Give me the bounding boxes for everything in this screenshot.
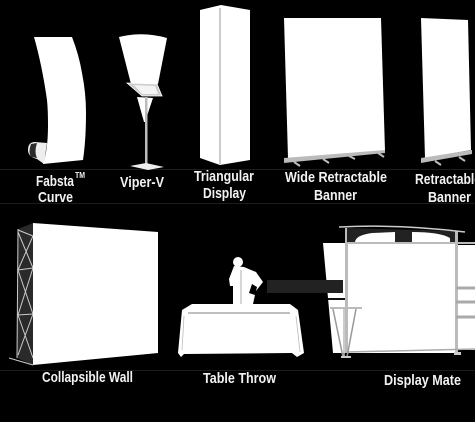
product: Display Mate: [267, 226, 475, 389]
icon: wide banner: [284, 18, 385, 166]
product: Retractable Banner: [415, 18, 475, 206]
label: Triangular Display: Display: [203, 185, 247, 202]
icon: retractable banner: [421, 18, 472, 165]
label: Fabsta Curve: [36, 171, 85, 206]
product: Wide Retractable Banner: [284, 18, 387, 204]
icon: viper stand: [119, 34, 167, 170]
icon: curved banner: [28, 37, 86, 164]
label: Triangular Display: Triangular: [194, 168, 254, 185]
label: Wide Retractable Banner: Wide Retractable: [285, 169, 387, 186]
label: Triangular Display: [194, 168, 254, 202]
icon: person: [229, 257, 263, 304]
icon: collapsible wall: [9, 223, 158, 365]
label: Display Mate: Display Mate: [384, 372, 461, 389]
label: Viper-V: Viper-V: [120, 174, 164, 191]
label: Fabsta Curve: Fabsta: [36, 173, 75, 190]
label: Fabsta Curve: TM: [75, 171, 85, 180]
label: Wide Retractable Banner: Banner: [314, 187, 357, 204]
product: Triangular Display: [194, 5, 254, 202]
product: Table Throw: [178, 257, 304, 387]
label: Retractable Banner: [415, 171, 475, 206]
label: Wide Retractable Banner: [285, 169, 387, 204]
product: Viper-V: [119, 34, 167, 191]
icon: display mate booth: [267, 226, 475, 358]
label: Fabsta Curve: Curve: [38, 189, 73, 206]
product: Collapsible Wall: [9, 223, 158, 386]
icon: table with throw: [178, 304, 304, 357]
label: Collapsible Wall: Collapsible Wall: [42, 369, 133, 386]
label: Table Throw: Table Throw: [203, 370, 276, 387]
icon: triangular tower: [200, 5, 250, 165]
product: Fabsta Curve: [28, 37, 86, 206]
